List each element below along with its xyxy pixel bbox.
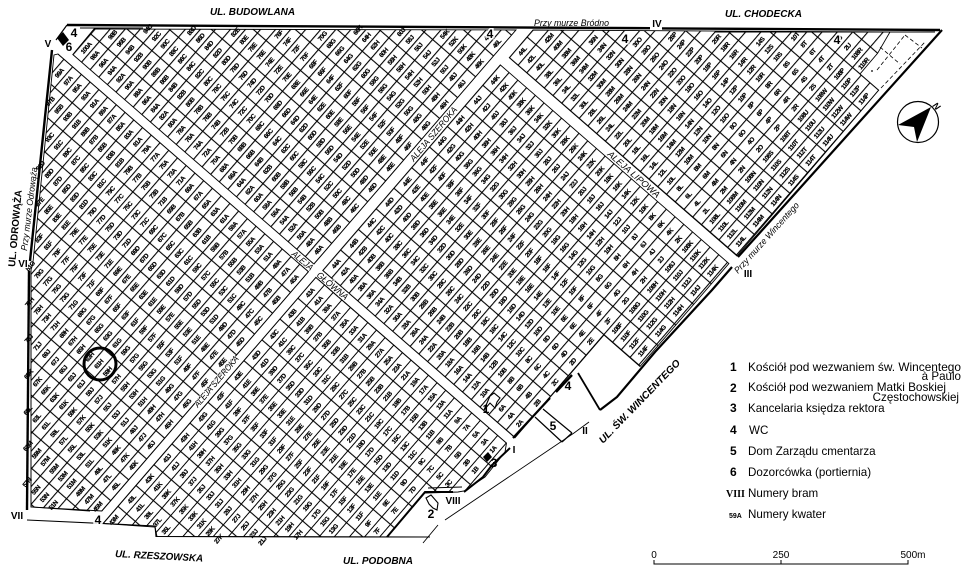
plot numbers: central quarter: 10A 10B 10C 10D 10E 10F 10G 10H 10J 10K: [479, 203, 650, 399]
plot numbers: north-east quarter: 36L 36M 36N: [552, 34, 600, 88]
street names: Przy murze Bródno: [534, 18, 609, 28]
avenue names: [191, 105, 662, 410]
plot numbers: southern quarter: [108, 286, 500, 574]
plot numbers: north-east quarter: 38L 38M: [543, 47, 573, 80]
plot numbers: southern quarter: 21J 21H 21G 21F 21E 21D 21C 21B 21A: [257, 369, 412, 547]
plot numbers: north-west quarter: 92A 92B 92C: [115, 30, 163, 85]
plot numbers: southern quarter: 43M 43L 43K 43J 43H 43G 43F 43E 43D 43C 43B 43A: [108, 286, 317, 527]
street names: Przy murze Odrowąża: [19, 167, 39, 251]
legend item 2: Częstochowskiej: [873, 391, 959, 404]
building 3: rector's office: [483, 452, 492, 462]
map numbers: 4: [565, 379, 572, 393]
plot numbers: north-west quarter: 50A 50B 50C 50D 50E 50F 50G 50H 50J 50K: [296, 43, 469, 242]
map numbers: 4: [834, 33, 841, 47]
map numbers: 5: [550, 419, 557, 433]
plot numbers: central quarter: 32A 32B 32C 32D 32E 32F 32G 32H 32J 32K: [383, 119, 554, 316]
plot numbers: north-west quarter: 84A 84B 84C 84D: [150, 39, 216, 114]
plot numbers: central quarter: 16A 16B 16C 16D 16E 16F 16G 16H 16J 16K: [453, 180, 624, 377]
plot numbers: north-west quarter: 94A 94B 94C: [106, 23, 155, 77]
plot numbers: central quarter: 18A 18B 18C 18D 18E 18F 18G 18H 18J 18K: [444, 172, 615, 369]
plot numbers: north-east quarter, 108 to 114: 114L 114M 114N 114S 114T 114U 114W 114P: [735, 91, 872, 249]
plot numbers: southern quarter: 5C 5B 5A: [435, 429, 482, 481]
panel: north-east quarter plots: [509, 0, 925, 256]
plot numbers: north-east quarter: 30L 30M 30N 30O: [578, 36, 644, 111]
plot numbers: central quarter: 4A 4B 4C 4D 4E 4F 4G 4H 4J 4K: [506, 227, 675, 421]
avenue names: ALEJA LIPOWA: [605, 148, 662, 200]
street names: UL. ODROWĄŻA: [5, 189, 25, 267]
building 6: gatehouse: [57, 32, 69, 46]
plot numbers: southern quarter: 27K 27J 27H 27G 27F 27E 27D 27C 27B 27A: [213, 347, 386, 545]
gate numbers: I: [513, 445, 516, 456]
plot numbers: north-west quarter: 100A: [80, 41, 94, 56]
map numbers: [66, 26, 841, 527]
plot numbers: western quarter: 77H 77G 77F 77E 77D 77C 77B 77A: [24, 151, 162, 309]
plot numbers: north-west quarter: 52A 52B 52C 52D 52E 52F 52G 52H 52J 52K: [287, 35, 460, 234]
icon: compass: [898, 100, 943, 142]
icon: church 1: [484, 393, 500, 410]
plot numbers: north-east quarter: 32L 32M 32N: [570, 49, 618, 103]
plot numbers: southern quarter: 7F 7E 7D 7C 7B 7A: [373, 422, 472, 536]
plot numbers: southern quarter: 23J 23H 23G 23F 23E 23D 23C 23B 23A: [249, 362, 404, 540]
street names: Przy murze Wincentego: [732, 200, 801, 275]
avenue names: GŁÓWNA: [315, 270, 350, 302]
plot numbers: western quarter: 71J 71H 71G 71F 71E 71D 71C 71B 71A: [32, 174, 188, 353]
panel: western quarter plots: [0, 54, 309, 534]
plot numbers: north-west quarter: 88A 88B 88C 88D: [132, 24, 199, 99]
plot numbers: north-west quarter: 74A 74B 74C 74D 74E 74F: [193, 36, 294, 152]
plot numbers: central quarter, 108 to 114: 114F 114G 114H 114J 114K: [637, 263, 720, 358]
legend item 1: 1: [730, 360, 737, 374]
plot numbers: central quarter: 30A 30B 30C 30D 30E 30F 30G 30H 30J 30K: [392, 127, 563, 324]
plot numbers: central quarter: 40A 40B 40C 40D 40E 40F 40G 40H 40J 40K: [348, 89, 519, 286]
plot numbers: southern quarter: 9F 9E 9D 9C 9B 9A: [364, 415, 464, 529]
plot numbers: western quarter: 57N 57M 57L 57K 57J 57H 57G 57F 57E 57D 57C 57B 57A: [22, 228, 249, 489]
plot numbers: southern quarter: 29K 29J 29H 29G 29F 29E 29D 29C 29B 29A: [205, 339, 378, 538]
plot numbers: north-west quarter: 60A 60B 60C 60D 60E 60F 60G 60H 60J: [253, 26, 408, 204]
plot numbers: north-east quarter: 14L 14M 14N 14O 14P 14R 14S: [648, 35, 767, 171]
legend item 3: 3: [730, 401, 737, 415]
plot numbers: central quarter: 44A 44B 44C 44D 44E 44F 44G 44H 44J 44K: [331, 74, 502, 270]
legend item plot numbers: 59A: [729, 513, 742, 520]
plot numbers: central quarter, 108 to 114: 112F 112G 112H 112J 112K: [628, 256, 712, 351]
plot numbers: north-west quarter: 64A 64B 64C 64D 64E 64F 64G 64H: [236, 31, 373, 189]
plot numbers: central quarter: 28A 28B 28C 28D 28E 28F 28G 28H 28J 28K: [401, 135, 572, 331]
legend item 1: [730, 360, 961, 383]
plot numbers: western quarter: 99A: [54, 67, 66, 80]
legend item 1: à Paulo: [922, 370, 961, 383]
street names: UL. RZESZOWSKA: [115, 549, 203, 565]
plot numbers: north-west quarter: 58A 58B 58C 58D 58E 58F 58G 58H 58J: [261, 34, 416, 212]
plot numbers: western quarter: 91D 91C 91B 91A: [35, 97, 101, 172]
legend item 2: [730, 381, 959, 404]
plot numbers: central quarter, 108 to 114: 110F 110G 110H 110J 110K: [619, 248, 703, 343]
legend item 4: [730, 423, 768, 437]
plot numbers: western quarter: 61M 61L 61K 61J 61H 61G 61F 61E 61D 61C 61B 61A: [22, 213, 231, 453]
plot numbers: southern quarter: 19H 19G 19F 19E 19D 19C 19B 19A: [284, 376, 422, 534]
plot numbers: north-east quarter: 44L: [517, 45, 529, 58]
plot numbers: central quarter: 26A 26B 26C 26D 26E 26F 26G 26H 26J 26K: [409, 142, 580, 339]
plot numbers: north-east quarter, 108 to 114: 112L 112M 112N 112S 112T 112U 112W 112P: [726, 84, 863, 241]
legend item gate numbers: VIII: [726, 489, 745, 500]
plot numbers: southern quarter: 1B 1A: [471, 444, 499, 476]
plot numbers: central quarter, 108 to 114: [611, 239, 722, 358]
plot numbers: north-east quarter: 6L 6M 6N 6O 6P 6R 6S 6T: [684, 47, 818, 201]
plot numbers: north-west quarter: 72A 72B 72C 72D 72E 72F: [201, 44, 303, 159]
legend item 4: 4: [730, 423, 737, 437]
plot numbers: north-east quarter: 8L 8M 8N 8O 8P 8R 8S 8T: [675, 40, 809, 193]
legend item 5: Dom Zarządu cmentarza: [748, 445, 876, 458]
plot numbers: western quarter: 47M 47L 47K 47J 47H 47G 47F 47E 47D 47C 47B 47A: [83, 266, 292, 506]
legend item 5: 5: [730, 444, 737, 458]
scale bar: 250: [773, 550, 790, 561]
scale bar: 500m: [900, 550, 926, 561]
plot numbers: western quarter: 89D 89C 89B 89A: [44, 105, 110, 180]
plot numbers: western quarter: 83F 83E 83D 83C 83B 83A: [34, 128, 136, 244]
plot numbers: north-east quarter: 24L 24M 24N 24O 24P: [605, 38, 688, 133]
plot numbers: western quarter: 79G 79F 79E 79D 79C 79B 79A: [33, 143, 153, 280]
legend item 3: Kancelaria księdza rektora: [748, 402, 885, 415]
gate numbers: VI: [18, 259, 28, 270]
plot numbers: southern quarter: 13G 13F 13E 13D 13C 13B 13A: [328, 398, 448, 536]
plot numbers: central quarter: 38A 38B 38C 38D 38E 38F 38G 38H 38J 38K: [357, 97, 528, 293]
legend item 2: Kościół pod wezwaniem Matki Boskiej: [748, 381, 946, 394]
avenue names: ALEJA SZEROKA: [407, 105, 459, 164]
plot numbers: north-west quarter: 70A 70B 70C 70D 70E 70F 70G: [210, 30, 329, 167]
legend item 4: WC: [749, 424, 768, 437]
legend item 6: 6: [730, 465, 737, 479]
gate numbers: [11, 19, 752, 522]
plot numbers: western quarter: 53N 53M 53L 53K 53J 53H 53G 53F 53E 53D 53C 53B 53A: [39, 243, 266, 504]
plot numbers: western quarter: 45M 45L 45K 45J 45H 45G 45F 45E 45D 45C 45B 45A: [92, 273, 301, 514]
scale bar: 0: [651, 550, 657, 561]
plot numbers: north-west quarter: 90A 90B 90C: [124, 38, 172, 92]
plot numbers: southern quarter: 37L 37K 37J 37H 37G 37F 37E 37D 37C 37B 37A: [152, 310, 343, 529]
map numbers: 4: [487, 27, 494, 41]
plot numbers: north-west quarter: 86A 86B 86C 86D: [141, 32, 207, 107]
plot numbers: central quarter: 24A 24B 24C 24D 24E 24F 24G 24H 24J 24K: [418, 150, 589, 346]
plot numbers: north-east quarter: [517, 0, 854, 217]
panel: north-west quarter plots: [73, 0, 516, 264]
scale bar: [651, 550, 926, 564]
plot numbers: central quarter: 2A 2B 2C 2D 2E 2F 2G 2H 2J 2K: [515, 234, 684, 429]
plot numbers: north-east quarter: 26L 26M 26N 26O 26P: [596, 30, 680, 126]
legend item 2: 2: [730, 381, 737, 395]
map numbers: 4: [95, 513, 102, 527]
highlight circle: [84, 348, 116, 380]
legend: [726, 360, 961, 521]
plot numbers: central quarter: 20A 20B 20C 20D 20E 20F 20G 20H 20J 20K: [435, 165, 607, 362]
plot numbers: north-east quarter: 34L 34M 34N: [561, 41, 609, 95]
plot numbers: north-east quarter: 40L 40M: [535, 40, 564, 73]
plot numbers: north-east quarter: 12L 12M 12N 12O 12P 12R 12S: [657, 43, 776, 179]
legend item plot numbers: Numery kwater: [748, 508, 826, 521]
street names: UL. ŚW. WINCENTEGO: [596, 356, 683, 446]
plot numbers: north-east quarter: 18L 18M 18N 18O 18P 18R: [631, 41, 732, 156]
plot numbers: western quarter: 75H 75G 75F 75E 75D 75C 75B 75A: [33, 158, 171, 317]
plot numbers: north-west quarter: 82A 82B 82C 82D 82E: [158, 26, 242, 122]
plot numbers: north-west quarter: [80, 0, 503, 258]
plot numbers: central quarter: 6A 6B 6C 6D 6E 6F 6G 6H 6J 6K: [498, 219, 667, 414]
plot numbers: western quarter: 87E 87D 87C 87B 87A: [34, 113, 118, 208]
plot numbers: north-west quarter: 48A 48B 48C 48D 48E 48F 48G 48H 48J 48K 48L: [304, 30, 495, 249]
plot numbers: western quarter: 85E 85D 85C 85B 85A: [43, 120, 127, 216]
dashed unfinished plots: [871, 35, 925, 88]
plot numbers: north-east quarter: 22L 22M 22N 22O 22P: [613, 46, 697, 141]
plot numbers: north-west quarter: 56A 56B 56C 56D 56E 56F 56G 56H 56J: [270, 41, 425, 219]
plot numbers: north-east quarter: 42L 42M: [526, 32, 556, 65]
gate numbers: II: [582, 426, 588, 437]
legend item 6: Dozorcówka (portiernia): [748, 466, 871, 479]
icon: compass: N: [931, 100, 943, 112]
plot numbers: southern quarter: 35L 35K 35J 35H 35G 35F 35E 35D 35C 35B 35A: [161, 317, 351, 536]
plot numbers: north-east quarter: 20L 20M 20N 20O 20P 20R: [622, 33, 723, 149]
plot numbers: southern quarter: 25J 25H 25G 25F 25E 25D 25C 25B 25A: [240, 354, 395, 532]
legend item 1: Kościół pod wezwaniem św. Wincentego: [748, 361, 961, 374]
plot numbers: north-east quarter: 2L 2M 2N 2O 2P 2R 2S 2T 2U: [702, 42, 854, 216]
gate numbers: V: [45, 39, 52, 50]
avenue names: ALEJA: [289, 248, 315, 273]
map numbers: 1: [483, 402, 490, 416]
plot numbers: central quarter: 8A 8B 8C 8D 8E 8F 8G 8H 8J 8K: [489, 212, 658, 406]
plot numbers: western quarter: 69K 69J 69H 69G 69F 69E 69D 69C 69B 69A: [23, 182, 196, 381]
street names: UL. CHODECKA: [725, 9, 802, 20]
plot numbers: north-west quarter: 98A 98B: [89, 29, 120, 62]
plot numbers: southern quarter: 17H 17G 17F 17E 17D 17C 17B 17A: [292, 383, 430, 541]
plot numbers: north-west quarter: 68A 68B 68C 68D 68E 68F 68G: [218, 37, 338, 174]
plot numbers: western quarter: 97B 97A: [45, 74, 75, 108]
plot numbers: central quarter: 42A 42B 42C 42D 42E 42F 42G 42H 42J 42K: [339, 81, 511, 278]
plot numbers: north-west quarter: 78A 78B 78C 78D 78E: [175, 41, 260, 137]
legend item gate numbers: Numery bram: [748, 487, 818, 500]
icon: church 2: [426, 495, 438, 510]
panel: southern quarter plots: [103, 277, 506, 574]
plot numbers: southern quarter: 31K 31J 31H 31G 31F 31E 31D 31C 31B 31A: [196, 332, 369, 530]
plot numbers: north-west quarter: 46A 46B 46C 46D 46E 46F 46G 46H 46J 46K 46L: [313, 38, 503, 257]
plot numbers: southern quarter: 39L 39K 39J 39H 39G 39F 39E 39D 39C 39B 39A: [143, 302, 334, 521]
plot numbers: north-west quarter: 96A 96B: [98, 36, 128, 70]
map numbers: 3: [491, 456, 498, 470]
plot numbers: central quarter: 34A 34B 34C 34D 34E 34F 34G 34H 34J 34K: [374, 112, 545, 308]
plot numbers: central quarter, 108 to 114: 108F 108G 108H 108J 108K: [611, 239, 695, 336]
gate numbers: VII: [11, 511, 23, 522]
plot numbers: western quarter: 59M 59L 59K 59J 59H 59G 59F 59E 59D 59C 59B 59A: [31, 220, 240, 461]
avenue names: ALEJA SZEROKA: [191, 354, 241, 410]
plot numbers: north-west quarter: 62A 62B 62C 62D 62E 62F 62G 62H: [244, 39, 382, 197]
map numbers: 6: [66, 40, 73, 54]
plot numbers: north-east quarter: 4L 4M 4N 4O 4P 4R 4S 4T 4U: [693, 34, 845, 208]
gate numbers: III: [744, 269, 752, 280]
plot numbers: western quarter: 93C 93B 93A: [44, 90, 93, 144]
plot numbers: north-east quarter: 28L 28M 28N 28O: [587, 44, 653, 118]
plot numbers: central quarter: 22A 22B 22C 22D 22E 22F 22G 22H 22J 22K: [427, 157, 598, 354]
plot numbers: central quarter: 14A 14B 14C 14D 14E 14F 14G 14H 14J 14K: [462, 188, 633, 384]
gate numbers: IV: [652, 19, 662, 30]
plot numbers: western quarter: 65L 65K 65J 65H 65G 65F 65E 65D 65C 65B 65A: [23, 198, 213, 417]
plot numbers: southern quarter: 33K 33J 33H 33G 33F 33E 33D 33C 33B 33A: [187, 324, 360, 523]
plot numbers: western quarter: 67K 67J 67H 67G 67F 67E 67D 67C 67B 67A: [32, 190, 205, 389]
plot numbers: north-west quarter: 80A 80B 80C 80D 80E: [167, 33, 251, 129]
plot numbers: western quarter: 81G 81F 81E 81D 81C 81B 81A: [25, 136, 145, 273]
plot numbers: central quarter: 36A 36B 36C 36D 36E 36F 36G 36H 36J 36K: [366, 104, 537, 301]
street names: UL. BUDOWLANA: [210, 7, 295, 18]
map numbers: 4: [71, 26, 78, 40]
plot numbers: southern quarter: 15G 15F 15E 15D 15C 15B 15A: [319, 391, 439, 528]
plot numbers: north-west quarter: 76A 76B 76C 76D 76E 76F: [184, 29, 285, 144]
plot numbers: north-east quarter, 108 to 114: 110L 110M 110N 110S 110T 110U 110W 110P 110R: [717, 56, 871, 233]
map numbers: 4: [622, 32, 629, 46]
plot numbers: western quarter: 73J 73H 73G 73F 73E 73D 73C 73B 73A: [24, 167, 179, 345]
plot numbers: central quarter: [331, 74, 685, 430]
plot numbers: western quarter: 63L 63K 63J 63H 63G 63F 63E 63D 63C 63B 63A: [31, 205, 222, 425]
panel: central quarter plots: [323, 65, 729, 438]
gate numbers: VIII: [445, 496, 461, 507]
plot numbers: southern quarter: 41L 41K 41J 41H 41G 41F 41E 41D 41C 41B 41A: [135, 295, 325, 514]
plot numbers: western quarter: 95B 95A: [53, 82, 84, 116]
plot numbers: north-east quarter: 16L 16M 16N 16O 16P 16R: [640, 48, 741, 164]
plot numbers: western quarter: 49M 49L 49K 49J 49H 49G 49F 49E 49D 49C 49B 49A: [74, 258, 284, 499]
plot numbers: southern quarter: 11F 11E 11D 11C 11B 11A: [354, 408, 455, 522]
plot numbers: north-east quarter, 108 to 114: 108L 108M 108N 108S 108T 108U 108W 108P 108R: [708, 46, 865, 226]
map numbers: 2: [428, 507, 435, 521]
plot numbers: southern quarter: 3C 3B 3A: [444, 437, 490, 489]
plot numbers: north-east quarter: 10L 10M 10N 10O 10P 10R 10S 10T: [666, 31, 802, 187]
plot numbers: western quarter: [0, 67, 302, 534]
plot numbers: western quarter: 55N 55M 55L 55K 55J 55H 55G 55F 55E 55D 55C 55B 55A: [30, 235, 257, 497]
plot numbers: north-west quarter: 66A 66B 66C 66D 66E 66F 66G 66H: [227, 24, 365, 182]
plot numbers: western quarter: 51N 51M 51L 51K 51J 51H 51G 51F 51E 51D 51C 51B 51A: [48, 250, 275, 512]
plot numbers: central quarter: 12A 12B 12C 12D 12E 12F 12G 12H 12J 12K: [470, 195, 642, 392]
plot numbers: north-west quarter: 54A 54B 54C 54D 54E 54F 54G 54H 54J 54K: [279, 28, 452, 227]
street names: UL. PODOBNA: [343, 556, 413, 567]
